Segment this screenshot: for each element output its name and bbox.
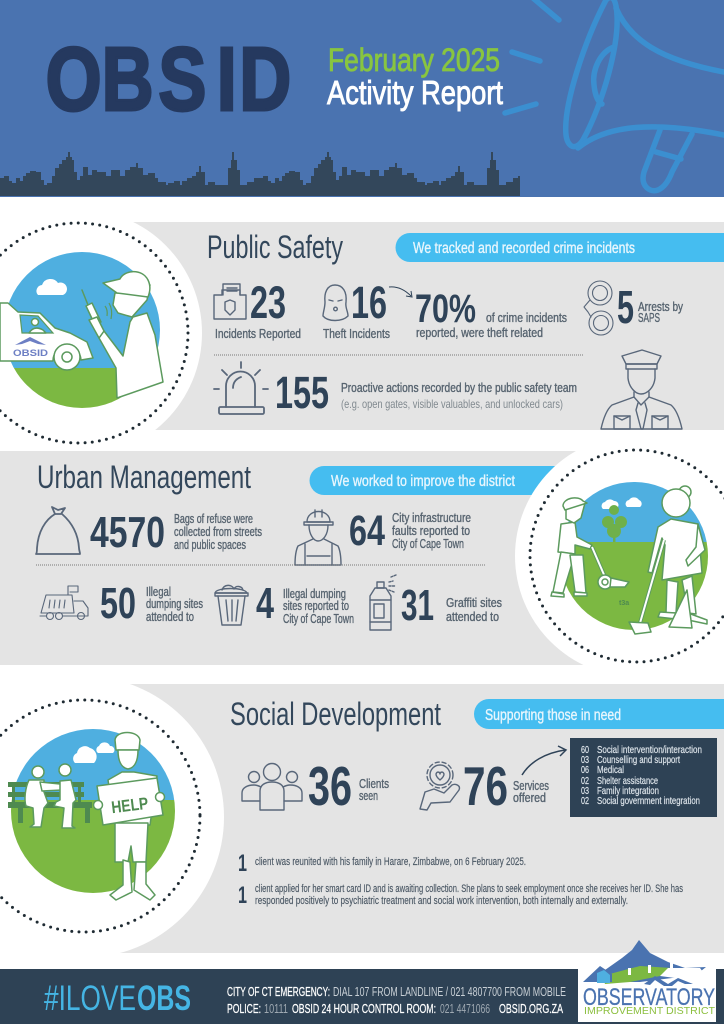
stat: 155 proactive actions: (e.g. open gates, visible valuables, and unlocked cars) — [341, 397, 563, 411]
stat: 4 dumping sites reported: Illegal dumping — [283, 587, 346, 601]
arrow: theft to percentage — [389, 287, 412, 297]
illustration: clean-up workers — [515, 448, 724, 665]
stat: 23 incidents — [215, 277, 301, 341]
stat: 76 services: 76 — [463, 755, 508, 817]
stat: 155 proactive actions — [275, 367, 577, 418]
hashtag: ILOVEOBS: OBS — [137, 979, 191, 1018]
table: services breakdown: 03 — [581, 785, 589, 797]
heading: social development: Social Development — [230, 696, 441, 732]
icon: hand with heart gear — [420, 762, 459, 810]
stat: 4570 bags: collected from streets — [174, 525, 262, 539]
table: services breakdown: 02 — [581, 795, 589, 807]
table: services breakdown: Counselling and support — [597, 754, 680, 766]
icon: police folder — [214, 284, 246, 319]
banner: improve the district — [310, 466, 570, 495]
icon: refuse bag — [36, 507, 80, 554]
heading: Activity Report: Activity Report — [327, 74, 503, 111]
table: services breakdown: 03 — [581, 754, 589, 766]
illustration: security guard with radio and patrol car — [0, 222, 202, 444]
stat: 4 dumping sites reported — [256, 579, 354, 628]
header banner — [0, 0, 724, 197]
stat: 50 dumping sites attended — [100, 579, 203, 628]
contact: emergency numbers — [227, 985, 566, 1016]
banner: supporting those in need — [474, 699, 724, 729]
stat: 23 incidents: Incidents Reported — [215, 327, 301, 341]
skyline silhouette — [0, 152, 520, 196]
stat: 64 infrastructure faults: City infrastructure — [392, 511, 471, 525]
stat: 31 graffiti sites: 31 — [401, 581, 434, 630]
stat: 16 theft: Theft Incidents — [323, 327, 390, 341]
icon: megaphone — [505, 0, 724, 191]
title: OBSID: OBSID — [46, 29, 291, 130]
icon: construction worker — [295, 510, 341, 565]
contact: emergency numbers: OBSID 24 HOUR CONTROL ROOM: — [292, 1002, 436, 1016]
banner: crime incidents — [396, 233, 724, 262]
icon: balaclava — [323, 285, 348, 320]
stat: 50 dumping sites attended: attended to — [146, 610, 194, 624]
illustration: people in need with help sign: HELP — [110, 794, 149, 817]
stat: 64 infrastructure faults — [349, 507, 471, 555]
icon: dump truck — [40, 586, 88, 620]
stat: 4570 bags: and public spaces — [174, 538, 246, 552]
stat: 155 proactive actions: Proactive actions recorded by the public safety team — [341, 381, 577, 395]
stat: 76 services: offered — [513, 791, 546, 805]
stat: 50 dumping sites attended: dumping sites — [146, 597, 203, 611]
icon: police officer — [601, 350, 682, 429]
stat: 64 infrastructure faults: City of Cape Town — [392, 537, 464, 551]
stat: 50 dumping sites attended: Illegal — [146, 585, 171, 599]
icon: spray can — [370, 575, 396, 630]
banner: crime incidents: We tracked and recorded crime incidents — [413, 240, 635, 257]
logo: Observatory Improvement District: IMPROVEMENT DISTRICT — [584, 1005, 716, 1017]
panel: urban management — [0, 448, 724, 665]
icon: group of people — [242, 764, 302, 810]
stat: 16 theft — [323, 277, 390, 341]
heading: urban management: Urban Management — [37, 459, 251, 495]
stat: 4570 bags: 4570 — [90, 508, 165, 557]
heading: public safety: Public Safety — [207, 229, 343, 265]
story: client reunited: client was reunited with his family in Harare, Zimbabwe, on 6 February 2025. — [255, 856, 526, 868]
illustration: people in need with help sign — [0, 676, 224, 958]
stat: 5 arrests: 5 — [617, 281, 634, 333]
stat: 31 graffiti sites: attended to — [446, 610, 499, 624]
story: client applied for ID: 1 — [238, 882, 247, 909]
stat: 31 graffiti sites — [401, 581, 502, 630]
contact: emergency numbers: POLICE: — [227, 1002, 261, 1016]
footer bar — [0, 940, 724, 1024]
panel: social development — [0, 676, 724, 958]
stat: 4570 bags — [90, 508, 262, 557]
stat: 31 graffiti sites: Graffiti sites — [446, 596, 502, 610]
table: services breakdown: Family integration — [597, 785, 659, 797]
icon: siren — [214, 362, 268, 414]
banner: improve the district: We worked to improve the district — [331, 473, 516, 490]
panel: public safety — [0, 222, 724, 444]
heading: February 2025: February 2025 — [328, 42, 500, 78]
stat: 36 clients: 36 — [308, 755, 352, 817]
stat: 16 theft: 16 — [351, 277, 387, 328]
illustration: security guard with radio and patrol car: OBSID — [13, 348, 48, 359]
table: services breakdown: 06 — [581, 764, 589, 776]
stat: 23 incidents: 23 — [250, 277, 286, 328]
arrow: services to breakdown — [522, 746, 566, 775]
stat: 70 percent: 70% — [415, 287, 476, 331]
stat: 4 dumping sites reported: 4 — [256, 579, 274, 628]
illustration: clean-up workers: t3a — [619, 600, 629, 607]
contact: emergency numbers: 10111 — [264, 1002, 288, 1016]
stat: 76 services: Services — [513, 779, 549, 793]
stat: 4 dumping sites reported: sites reported to — [283, 599, 349, 613]
stat: 4 dumping sites reported: City of Cape Town — [283, 612, 354, 626]
stat: 70 percent: of crime incidents — [486, 311, 567, 325]
banner: supporting those in need: Supporting those in need — [485, 707, 621, 724]
logo: Observatory Improvement District — [578, 940, 716, 1022]
contact: emergency numbers: OBSID.ORG.ZA — [499, 1002, 563, 1016]
story: client applied for ID — [238, 882, 683, 909]
stat: 5 arrests: SAPS — [638, 311, 660, 325]
table: services breakdown: 02 — [581, 775, 589, 787]
story: client reunited — [238, 850, 526, 877]
stat: 70 percent: reported, were theft related — [416, 326, 543, 340]
stat: 155 proactive actions: 155 — [275, 367, 329, 418]
story: client reunited: 1 — [238, 850, 247, 877]
icon: handcuffs — [584, 281, 613, 335]
stat: 70 percent — [415, 287, 567, 340]
stat: 5 arrests: Arrests by — [638, 300, 684, 314]
stat: 5 arrests — [617, 281, 684, 333]
contact: emergency numbers: 021 4471066 — [440, 1002, 490, 1016]
contact: emergency numbers: CITY OF CT EMERGENCY: — [227, 985, 330, 999]
stat: 36 clients: Clients — [359, 777, 389, 791]
icon: rubbish bin — [215, 585, 248, 625]
table: services breakdown — [570, 738, 717, 817]
hashtag: ILOVEOBS: #ILOVE — [44, 979, 136, 1018]
contact: emergency numbers: DIAL 107 FROM LANDLINE / 021 4807700 FROM MOBILE — [333, 985, 566, 999]
stat: 4570 bags: Bags of refuse were — [174, 512, 253, 526]
table: services breakdown: Medical — [597, 764, 624, 776]
stat: 64 infrastructure faults: faults reported to — [392, 524, 470, 538]
stat: 50 dumping sites attended: 50 — [100, 579, 136, 628]
table: services breakdown: Shelter assistance — [597, 775, 658, 787]
table: services breakdown: 60 — [581, 744, 589, 756]
stat: 36 clients: seen — [359, 789, 378, 803]
stat: 64 infrastructure faults: 64 — [349, 507, 385, 555]
